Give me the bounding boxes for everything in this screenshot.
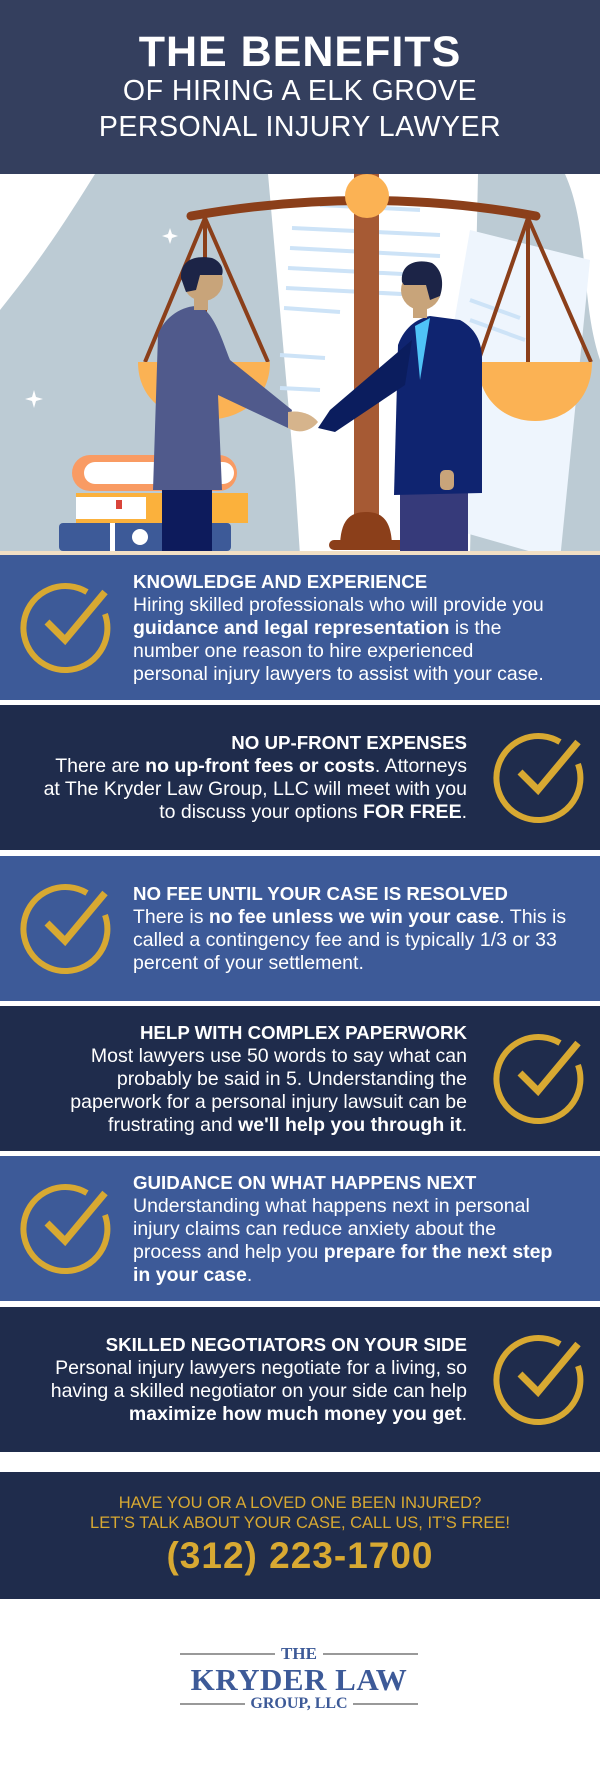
header xyxy=(0,0,600,174)
text block: Hiring skilled professionals who will provide you xyxy=(133,594,544,616)
text block: frustrating and we'll help you through it. xyxy=(108,1114,467,1136)
right pan xyxy=(478,218,592,421)
sparkles xyxy=(25,228,178,408)
text block: There is no fee unless we win your case. This is xyxy=(133,906,566,928)
text block xyxy=(133,570,544,684)
panel: no fee until resolved xyxy=(0,856,600,1001)
icon: check circle xyxy=(20,583,110,673)
text block: number one reason to hire experienced xyxy=(133,640,473,662)
cta question xyxy=(90,1494,510,1532)
text block: percent of your settlement. xyxy=(133,952,364,974)
text block: having a skilled negotiator on your side can help xyxy=(51,1380,467,1402)
icon: check circle xyxy=(20,1184,110,1274)
scale beam xyxy=(191,200,536,216)
text block: Understanding what happens next in personal xyxy=(133,1194,530,1216)
title: THE BENEFITS xyxy=(139,28,461,76)
text block: maximize how much money you get. xyxy=(129,1403,467,1425)
text block: Personal injury lawyers negotiate for a living, so xyxy=(55,1357,467,1379)
call to action xyxy=(0,1472,600,1599)
icon: check circle xyxy=(493,733,584,823)
text block xyxy=(51,1334,467,1425)
text block: at The Kryder Law Group, LLC will meet with you xyxy=(44,778,467,800)
cta question: LET’S TALK ABOUT YOUR CASE, CALL US, IT’S FREE! xyxy=(90,1514,510,1532)
panel: guidance on next steps xyxy=(0,1156,600,1301)
text block: NO UP-FRONT EXPENSES xyxy=(231,732,467,753)
logo: KRYDER LAW xyxy=(191,1662,407,1697)
logo xyxy=(180,1644,418,1712)
subtitle line 2: PERSONAL INJURY LAWYER xyxy=(99,111,501,143)
text block: paperwork for a personal injury lawsuit can be xyxy=(70,1090,467,1112)
text block xyxy=(133,1172,552,1286)
floor xyxy=(0,551,600,555)
text block: There are no up-front fees or costs. Attorneys xyxy=(55,755,467,777)
documents xyxy=(268,174,590,560)
cta question: HAVE YOU OR A LOVED ONE BEEN INJURED? xyxy=(119,1494,481,1512)
text block: called a contingency fee and is typically 1/3 or 33 xyxy=(133,929,557,951)
icon: check circle xyxy=(493,1034,584,1124)
books xyxy=(59,455,248,551)
text block xyxy=(133,883,566,974)
text block xyxy=(44,732,467,823)
icon: check circle xyxy=(20,884,110,974)
text block: GUIDANCE ON WHAT HAPPENS NEXT xyxy=(133,1172,476,1192)
panel: complex paperwork xyxy=(0,1006,600,1151)
text block: in your case. xyxy=(133,1264,252,1286)
left pan xyxy=(138,218,270,420)
text block: personal injury lawyers to assist with your case. xyxy=(133,662,544,684)
text block: SKILLED NEGOTIATORS ON YOUR SIDE xyxy=(106,1334,467,1355)
right man xyxy=(318,261,482,555)
text block: process and help you prepare for the next step xyxy=(133,1240,552,1262)
text block: HELP WITH COMPLEX PAPERWORK xyxy=(140,1022,467,1042)
text block xyxy=(70,1022,467,1136)
text block: probably be said in 5. Understanding the xyxy=(117,1068,467,1090)
background blob xyxy=(0,174,600,555)
left man xyxy=(153,257,318,555)
text block: to discuss your options FOR FREE. xyxy=(159,801,467,823)
subtitle line 1: OF HIRING A ELK GROVE xyxy=(123,75,477,107)
logo: GROUP, LLC xyxy=(250,1695,348,1712)
panel: no up-front expenses xyxy=(0,705,600,850)
icon: check circle xyxy=(493,1335,584,1425)
phone number: (312) 223-1700 xyxy=(166,1535,434,1576)
scale pole and base xyxy=(329,174,406,550)
panel: knowledge and experience xyxy=(0,555,600,700)
text block: NO FEE UNTIL YOUR CASE IS RESOLVED xyxy=(133,883,508,904)
text block: guidance and legal representation is the xyxy=(133,616,501,638)
illustration: handshake under scales of justice xyxy=(0,174,600,555)
logo: THE xyxy=(281,1644,317,1663)
text block: Most lawyers use 50 words to say what can xyxy=(91,1044,467,1066)
panel: skilled negotiators xyxy=(0,1307,600,1452)
text block: KNOWLEDGE AND EXPERIENCE xyxy=(133,570,427,592)
text block: injury claims can reduce anxiety about the xyxy=(133,1218,496,1240)
